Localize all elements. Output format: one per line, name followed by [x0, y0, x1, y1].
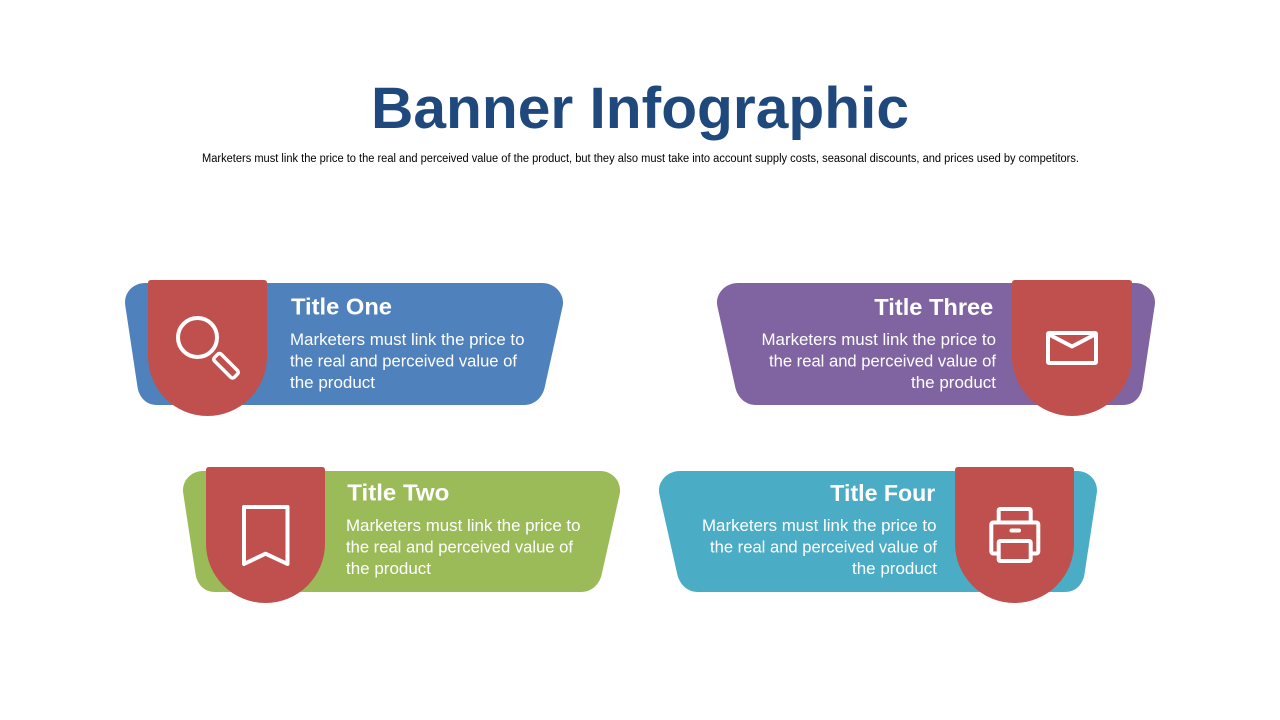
subtitle text block: Marketers must link the price to the real and perceived value of the product, but they also must take into account supply costs, seasonal discounts, and prices used by competitors.: [202, 153, 1079, 165]
green banner: [183, 471, 620, 592]
heading: title one: Title One: [291, 294, 392, 320]
body text: [346, 516, 580, 578]
body text: Marketers must link the price to: [702, 516, 936, 535]
body text: Marketers must link the price to: [290, 330, 524, 349]
body text: the product: [346, 559, 431, 578]
red shield: [955, 467, 1074, 603]
icon: bookmark: [244, 507, 288, 564]
body text: [762, 330, 996, 392]
panel: title two: [183, 467, 620, 603]
body text: the product: [290, 373, 375, 392]
body text: the real and perceived value of: [769, 352, 996, 370]
body text: the product: [852, 559, 937, 578]
body text: the real and perceived value of: [290, 352, 517, 370]
body text: [702, 516, 937, 578]
body text: Marketers must link the price to: [346, 516, 580, 535]
panel: title three: [717, 280, 1155, 416]
blue banner: [125, 283, 563, 405]
red shield: [148, 280, 267, 416]
teal banner: [659, 471, 1097, 592]
heading: title three: Title Three: [874, 294, 993, 320]
purple banner: [717, 283, 1155, 405]
panel: title four: [659, 467, 1097, 603]
body text: the real and perceived value of: [710, 538, 937, 556]
body text: [290, 330, 524, 392]
body text: the real and perceived value of: [346, 538, 573, 556]
icon: printer: [991, 509, 1038, 561]
icon: envelope: [1048, 333, 1096, 363]
icon: magnifying glass: [178, 318, 239, 379]
title: Banner Infographic: [371, 76, 909, 141]
body text: the product: [911, 373, 996, 392]
panel: title one: [125, 280, 563, 416]
body text: Marketers must link the price to: [762, 330, 996, 349]
heading: title four: Title Four: [830, 480, 935, 506]
heading: title two: Title Two: [347, 480, 449, 506]
red shield: [1012, 280, 1132, 416]
red shield: [206, 467, 325, 603]
